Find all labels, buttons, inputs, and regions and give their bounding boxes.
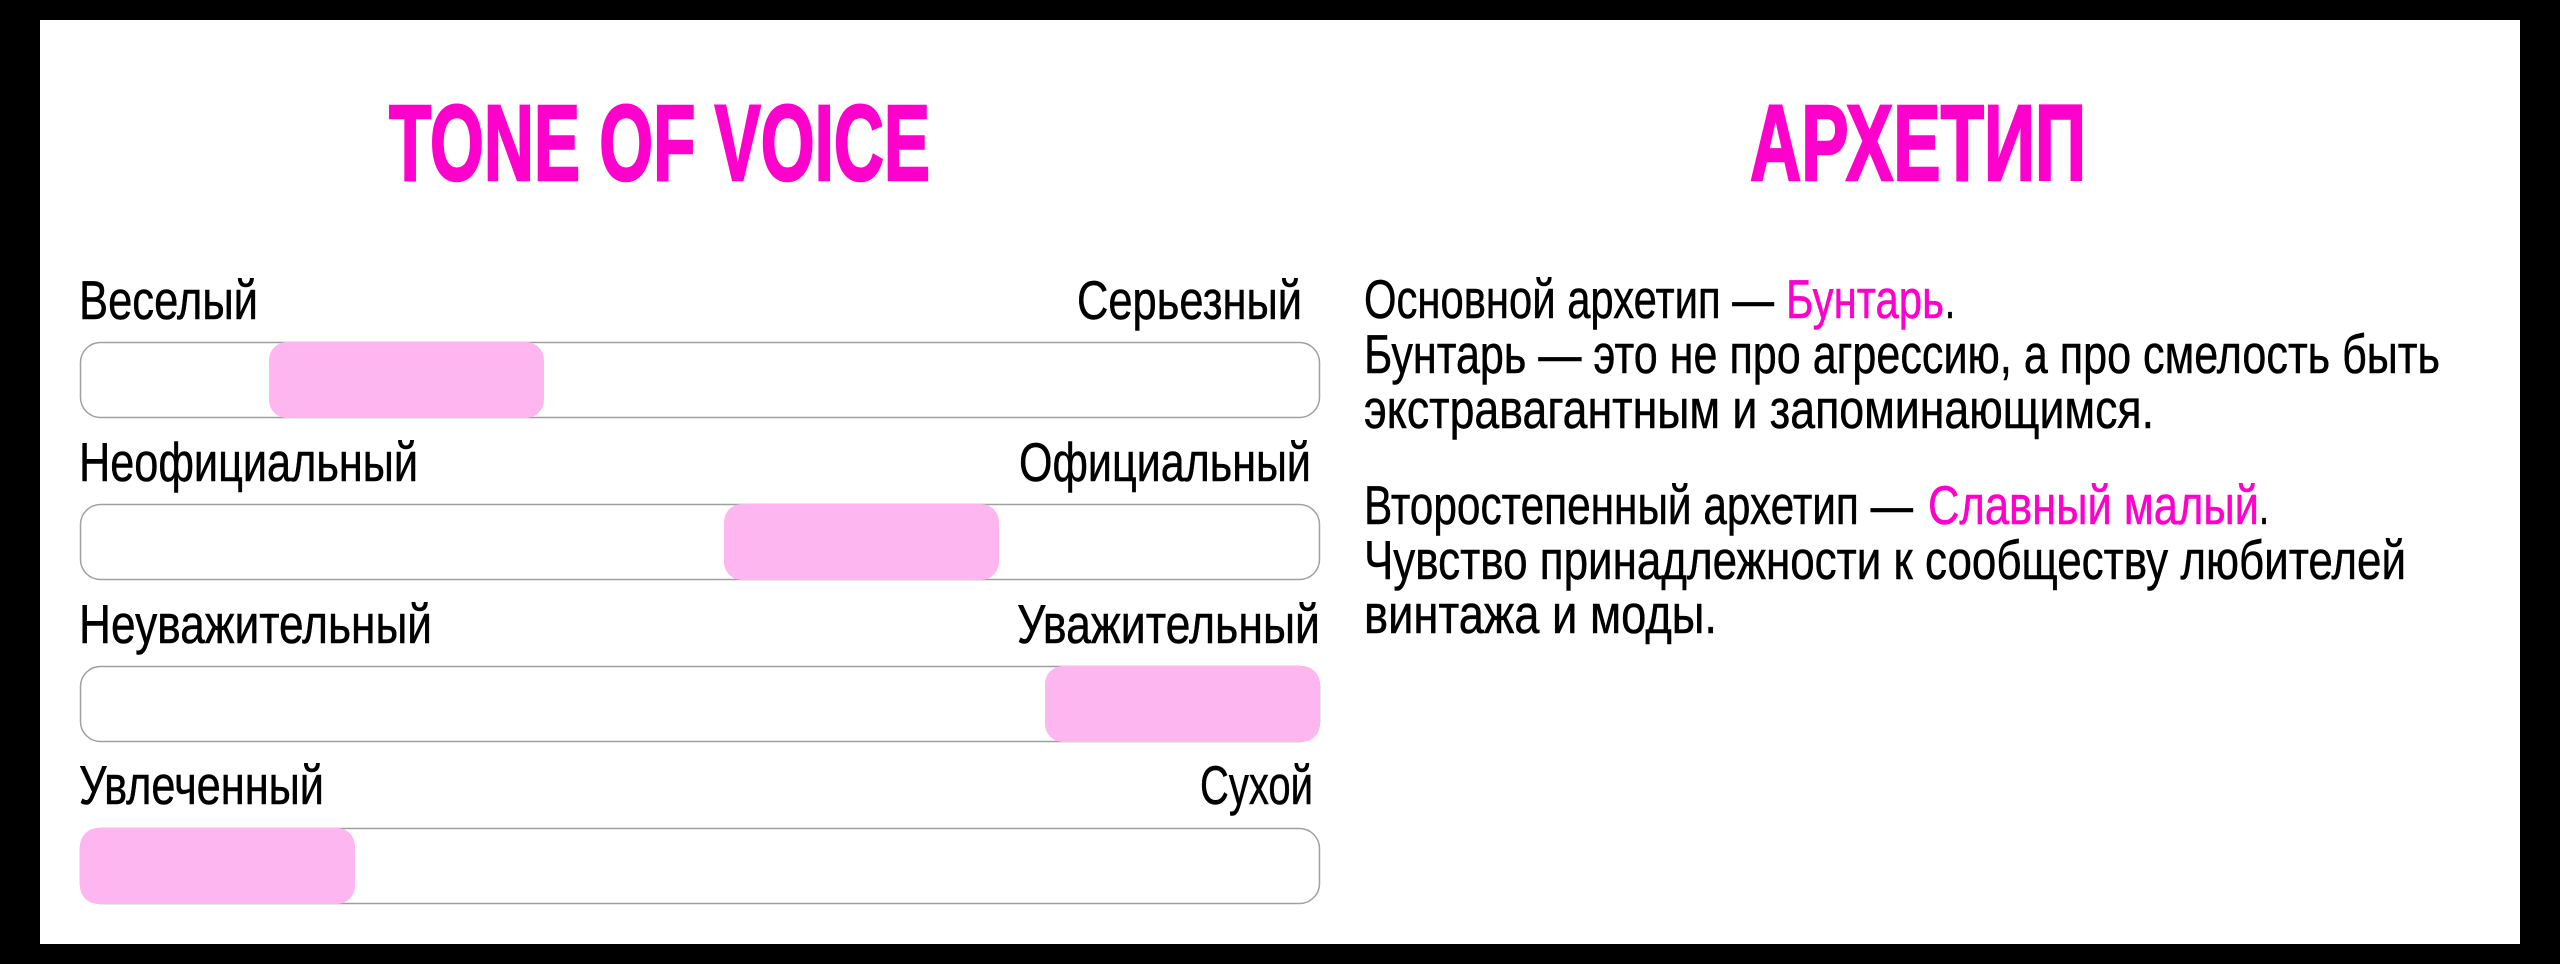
text block: secondary archetype: винтажа и моды. bbox=[1364, 583, 1717, 645]
text block: secondary archetype bbox=[1364, 474, 2406, 645]
scale: увлечённый – сухой: Сухой bbox=[1200, 754, 1313, 816]
text block: primary archetype: Бунтарь bbox=[1786, 268, 1944, 330]
scale: весёлый – серьёзный bbox=[79, 269, 1320, 418]
scale: неофициальный – официальный: Официальный bbox=[1019, 431, 1311, 493]
scale: увлечённый – сухой: Увлеченный bbox=[79, 754, 324, 816]
text block: secondary archetype: . bbox=[2259, 474, 2269, 536]
text block: primary archetype bbox=[1364, 268, 2440, 440]
scale: неуважительный – уважительный: Неуважительный bbox=[79, 593, 432, 655]
scale: неофициальный – официальный bbox=[79, 431, 1320, 580]
panel: tone of voice bbox=[79, 82, 1320, 904]
scale: неофициальный – официальный: Неофициальный bbox=[79, 431, 418, 493]
text block: primary archetype: экстравагантным и запоминающимся. bbox=[1364, 378, 2154, 440]
scale: неуважительный – уважительный bbox=[79, 593, 1320, 742]
scale: весёлый – серьёзный: Веселый bbox=[79, 269, 258, 331]
heading: tone of voice: TONE OF VOICE bbox=[389, 82, 930, 203]
scale: неуважительный – уважительный: Уважительный bbox=[1017, 593, 1320, 655]
scale: весёлый – серьёзный: Серьезный bbox=[1077, 269, 1302, 331]
heading: archetype: АРХЕТИП bbox=[1750, 82, 2086, 203]
panel: archetype bbox=[1364, 82, 2440, 645]
text block: primary archetype: Основной архетип — bbox=[1364, 268, 1774, 330]
text block: secondary archetype: Славный малый bbox=[1928, 474, 2259, 536]
scale: увлечённый – сухой bbox=[79, 754, 1320, 904]
text block: primary archetype: . bbox=[1945, 268, 1955, 330]
text block: secondary archetype: Второстепенный архетип — bbox=[1364, 474, 1913, 536]
